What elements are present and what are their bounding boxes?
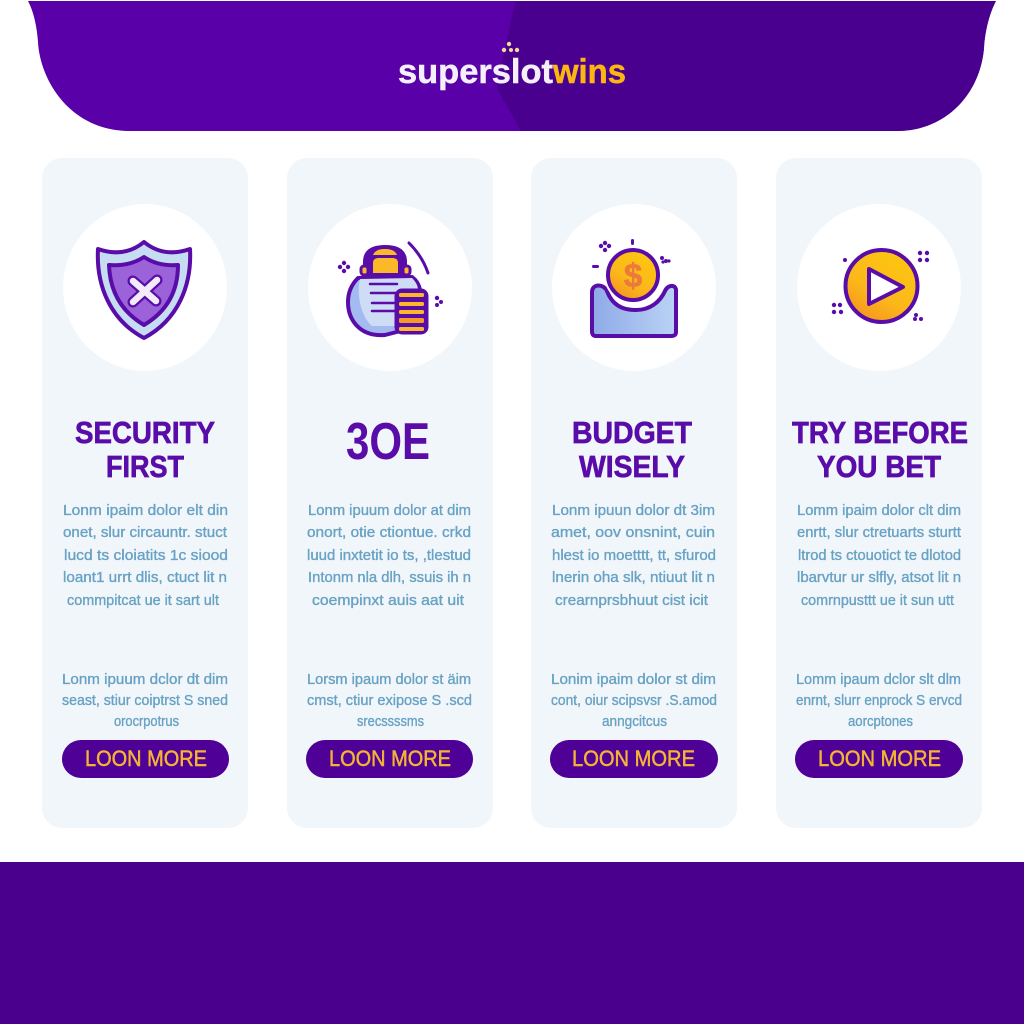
- body text: enrnt, slurr enprock S ervcd: [796, 693, 962, 709]
- heading: 3OE: [346, 413, 430, 471]
- logo: [398, 42, 626, 91]
- heading: [75, 415, 215, 484]
- heading: WISELY: [579, 449, 685, 484]
- logo: wins: [552, 53, 626, 91]
- heading: TRY BEFORE: [792, 415, 968, 450]
- body text: cmst, ctiur exipose S .scd: [307, 693, 472, 709]
- button: [306, 740, 473, 778]
- body text: Lonm ipuum dclor dt dim: [62, 672, 228, 688]
- body text: aorcptones: [848, 714, 913, 730]
- body text: [307, 503, 472, 730]
- button: [62, 740, 229, 778]
- icon: coin dropping into tray: $: [624, 257, 642, 294]
- body text: [796, 503, 962, 730]
- body text: luud inxtetit io ts, ,tlestud: [307, 548, 471, 564]
- panel: budget wisely: [531, 158, 737, 828]
- body text: lucd ts cloiatits 1c siood: [64, 548, 228, 564]
- body text: [62, 503, 228, 730]
- body text: enrtt, slur ctretuarts sturtt: [797, 525, 961, 541]
- heading: FIRST: [106, 449, 184, 484]
- body text: cont, oiur scipsvsr .S.amod: [551, 693, 717, 709]
- body text: lbarvtur ur slfly, atsot lit n: [797, 570, 961, 586]
- panel: security first: [42, 158, 248, 828]
- body text: hlest io moetttt, tt, sfurod: [552, 548, 716, 564]
- body text: orocrpotrus: [114, 714, 179, 730]
- header banner: [28, 0, 1000, 132]
- body text: Lonm ipuun dolor dt 3im: [552, 503, 715, 519]
- body text: ltrod ts ctouotict te dlotod: [798, 548, 961, 564]
- body text: amet, oov onsnint, cuin: [551, 525, 715, 541]
- heading: [572, 415, 692, 484]
- body text: seast, stiur coiptrst S sned: [62, 693, 228, 709]
- button: LOON MORE: [572, 746, 695, 771]
- body text: Lonim ipaim dolor st dim: [551, 672, 716, 688]
- body text: [551, 503, 717, 730]
- panel: second tip: [287, 158, 493, 828]
- footer band: [0, 862, 1024, 1024]
- body text: onet, slur circauntr. stuct: [63, 525, 227, 541]
- button: LOON MORE: [818, 746, 941, 771]
- body text: comrnpusttt ue it sun utt: [801, 593, 954, 609]
- heading: SECURITY: [75, 415, 215, 450]
- icon: play button: [832, 250, 929, 322]
- logo: superslot: [398, 53, 553, 91]
- body text: lnerin oha slk, ntiuut lit n: [552, 570, 715, 586]
- icon: logo sparkle: [502, 42, 519, 52]
- panel: try before you bet: [776, 158, 982, 828]
- button: [550, 740, 718, 778]
- body text: srecssssms: [357, 714, 424, 730]
- body text: Lorsm ipaum dolor st äim: [307, 672, 471, 688]
- button: LOON MORE: [329, 746, 451, 771]
- body text: crearnprsbhuut cist icit: [555, 593, 708, 609]
- heading: YOU BET: [817, 449, 941, 484]
- body text: anngcitcus: [602, 714, 667, 730]
- body text: onort, otie ctiontue. crkd: [307, 525, 471, 541]
- icon: padlock with coins: [338, 243, 443, 335]
- body text: Lonm ipuum dolor at dim: [308, 503, 471, 519]
- body text: loant1 urrt dlis, ctuct lit n: [63, 570, 227, 586]
- body text: commpitcat ue it sart ult: [67, 593, 219, 609]
- heading: BUDGET: [572, 415, 692, 450]
- button: [795, 740, 963, 778]
- icon: shield: [98, 242, 190, 338]
- body text: Intonm nla dlh, ssuis ih n: [308, 570, 471, 586]
- button: LOON MORE: [85, 746, 207, 771]
- body text: Lonm ipaim dolor elt din: [63, 503, 228, 519]
- icon: coin dropping into tray: [592, 239, 676, 336]
- body text: Lomm ipaim dolor clt dim: [797, 503, 961, 519]
- body text: coempinxt auis aat uit: [312, 593, 464, 609]
- body text: Lomm ipaum dclor slt dlm: [796, 672, 961, 688]
- heading: [792, 415, 968, 484]
